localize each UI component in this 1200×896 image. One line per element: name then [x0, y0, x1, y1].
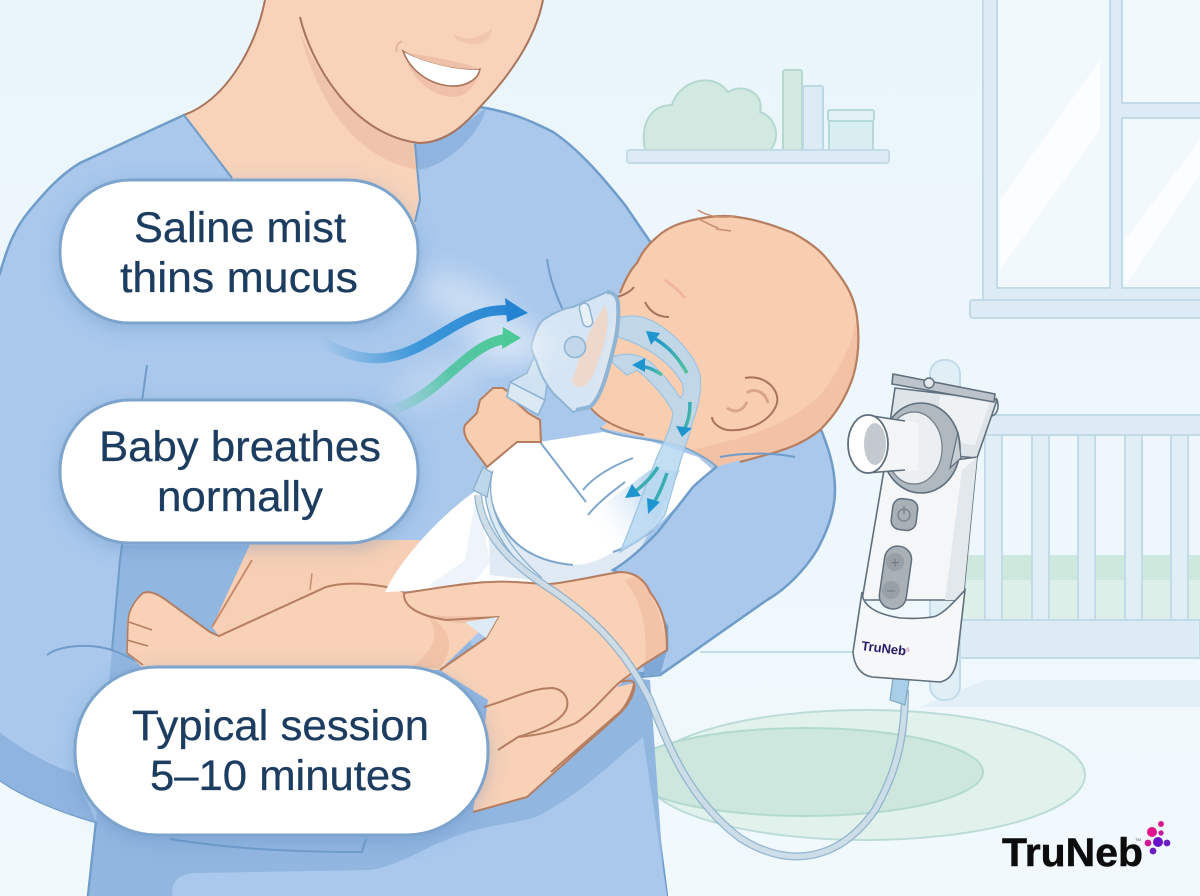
smile [396, 41, 480, 97]
airway mist overlay [612, 316, 700, 552]
callout: baby breathes [60, 400, 418, 543]
baby legs [127, 540, 486, 670]
cradle base [853, 590, 965, 682]
eye and eyebrow [617, 287, 669, 317]
callout: saline mist: Saline mist [134, 204, 346, 252]
green inflow arrow [388, 327, 521, 411]
neck and face [184, 0, 543, 225]
hair wisps [697, 210, 735, 231]
mist cloud [386, 260, 548, 416]
baby onesie [385, 432, 713, 592]
neck shadow [300, 33, 419, 170]
callout: saline mist [60, 180, 418, 323]
caregiver supporting sleeve [613, 420, 835, 677]
jaw and neck outlines [184, 0, 543, 143]
oxygen mask [507, 292, 618, 415]
TruNeb logo: TruNeb [1002, 831, 1143, 875]
head outline [620, 216, 858, 462]
under-sleeve shade [488, 480, 650, 583]
ear [712, 377, 777, 430]
plus minus control: + [890, 555, 900, 572]
caregiver [0, 0, 740, 896]
callout: session time: 5–10 minutes [150, 752, 412, 800]
crib [700, 360, 1200, 707]
callout: session time: Typical session [132, 702, 429, 750]
mouthpiece tube [866, 415, 918, 473]
blue inflow arrow [320, 298, 528, 358]
chest mist fade [588, 470, 680, 553]
shirt [0, 107, 740, 896]
power button [890, 498, 919, 531]
callout: session time [75, 667, 488, 835]
lower shirt highlight [172, 737, 667, 896]
callout: saline mist: thins mucus [120, 254, 358, 302]
TruNeb logo: TM [1135, 837, 1141, 842]
nose [452, 28, 492, 44]
callout: baby breathes: normally [157, 473, 323, 521]
chin [590, 407, 644, 435]
collar line [600, 428, 717, 467]
window [970, 0, 1200, 318]
left arm shade band [0, 730, 100, 830]
baby head [590, 210, 858, 467]
top cap [892, 374, 995, 402]
airway arrows [625, 331, 692, 514]
plus minus control [878, 544, 913, 611]
sleeve ridge line [720, 454, 795, 457]
callout: baby breathes: Baby breathes [99, 423, 381, 471]
nebulizer tubing [473, 467, 905, 856]
collar lines [184, 115, 420, 222]
onesie sleeve [487, 442, 613, 565]
device tube stem [890, 678, 909, 705]
portable nebulizer device [848, 374, 998, 705]
device brand label: TruNeb [861, 638, 907, 658]
cuff shade [643, 650, 667, 677]
caregiver hand [404, 572, 667, 812]
baby hand on mask [464, 388, 541, 467]
plus minus control: – [887, 582, 896, 599]
main body [862, 457, 977, 600]
mouthpiece ring [882, 403, 960, 493]
shoulder shadow [415, 108, 486, 170]
TruNeb logo [1002, 821, 1170, 875]
head shading [690, 317, 858, 467]
shelf with plant, books and box [627, 70, 889, 163]
shirt fold lines [47, 259, 563, 896]
device brand label: 6 [906, 648, 910, 654]
rug [627, 710, 1085, 840]
torso shading [88, 545, 665, 896]
medicine cup [886, 388, 997, 458]
